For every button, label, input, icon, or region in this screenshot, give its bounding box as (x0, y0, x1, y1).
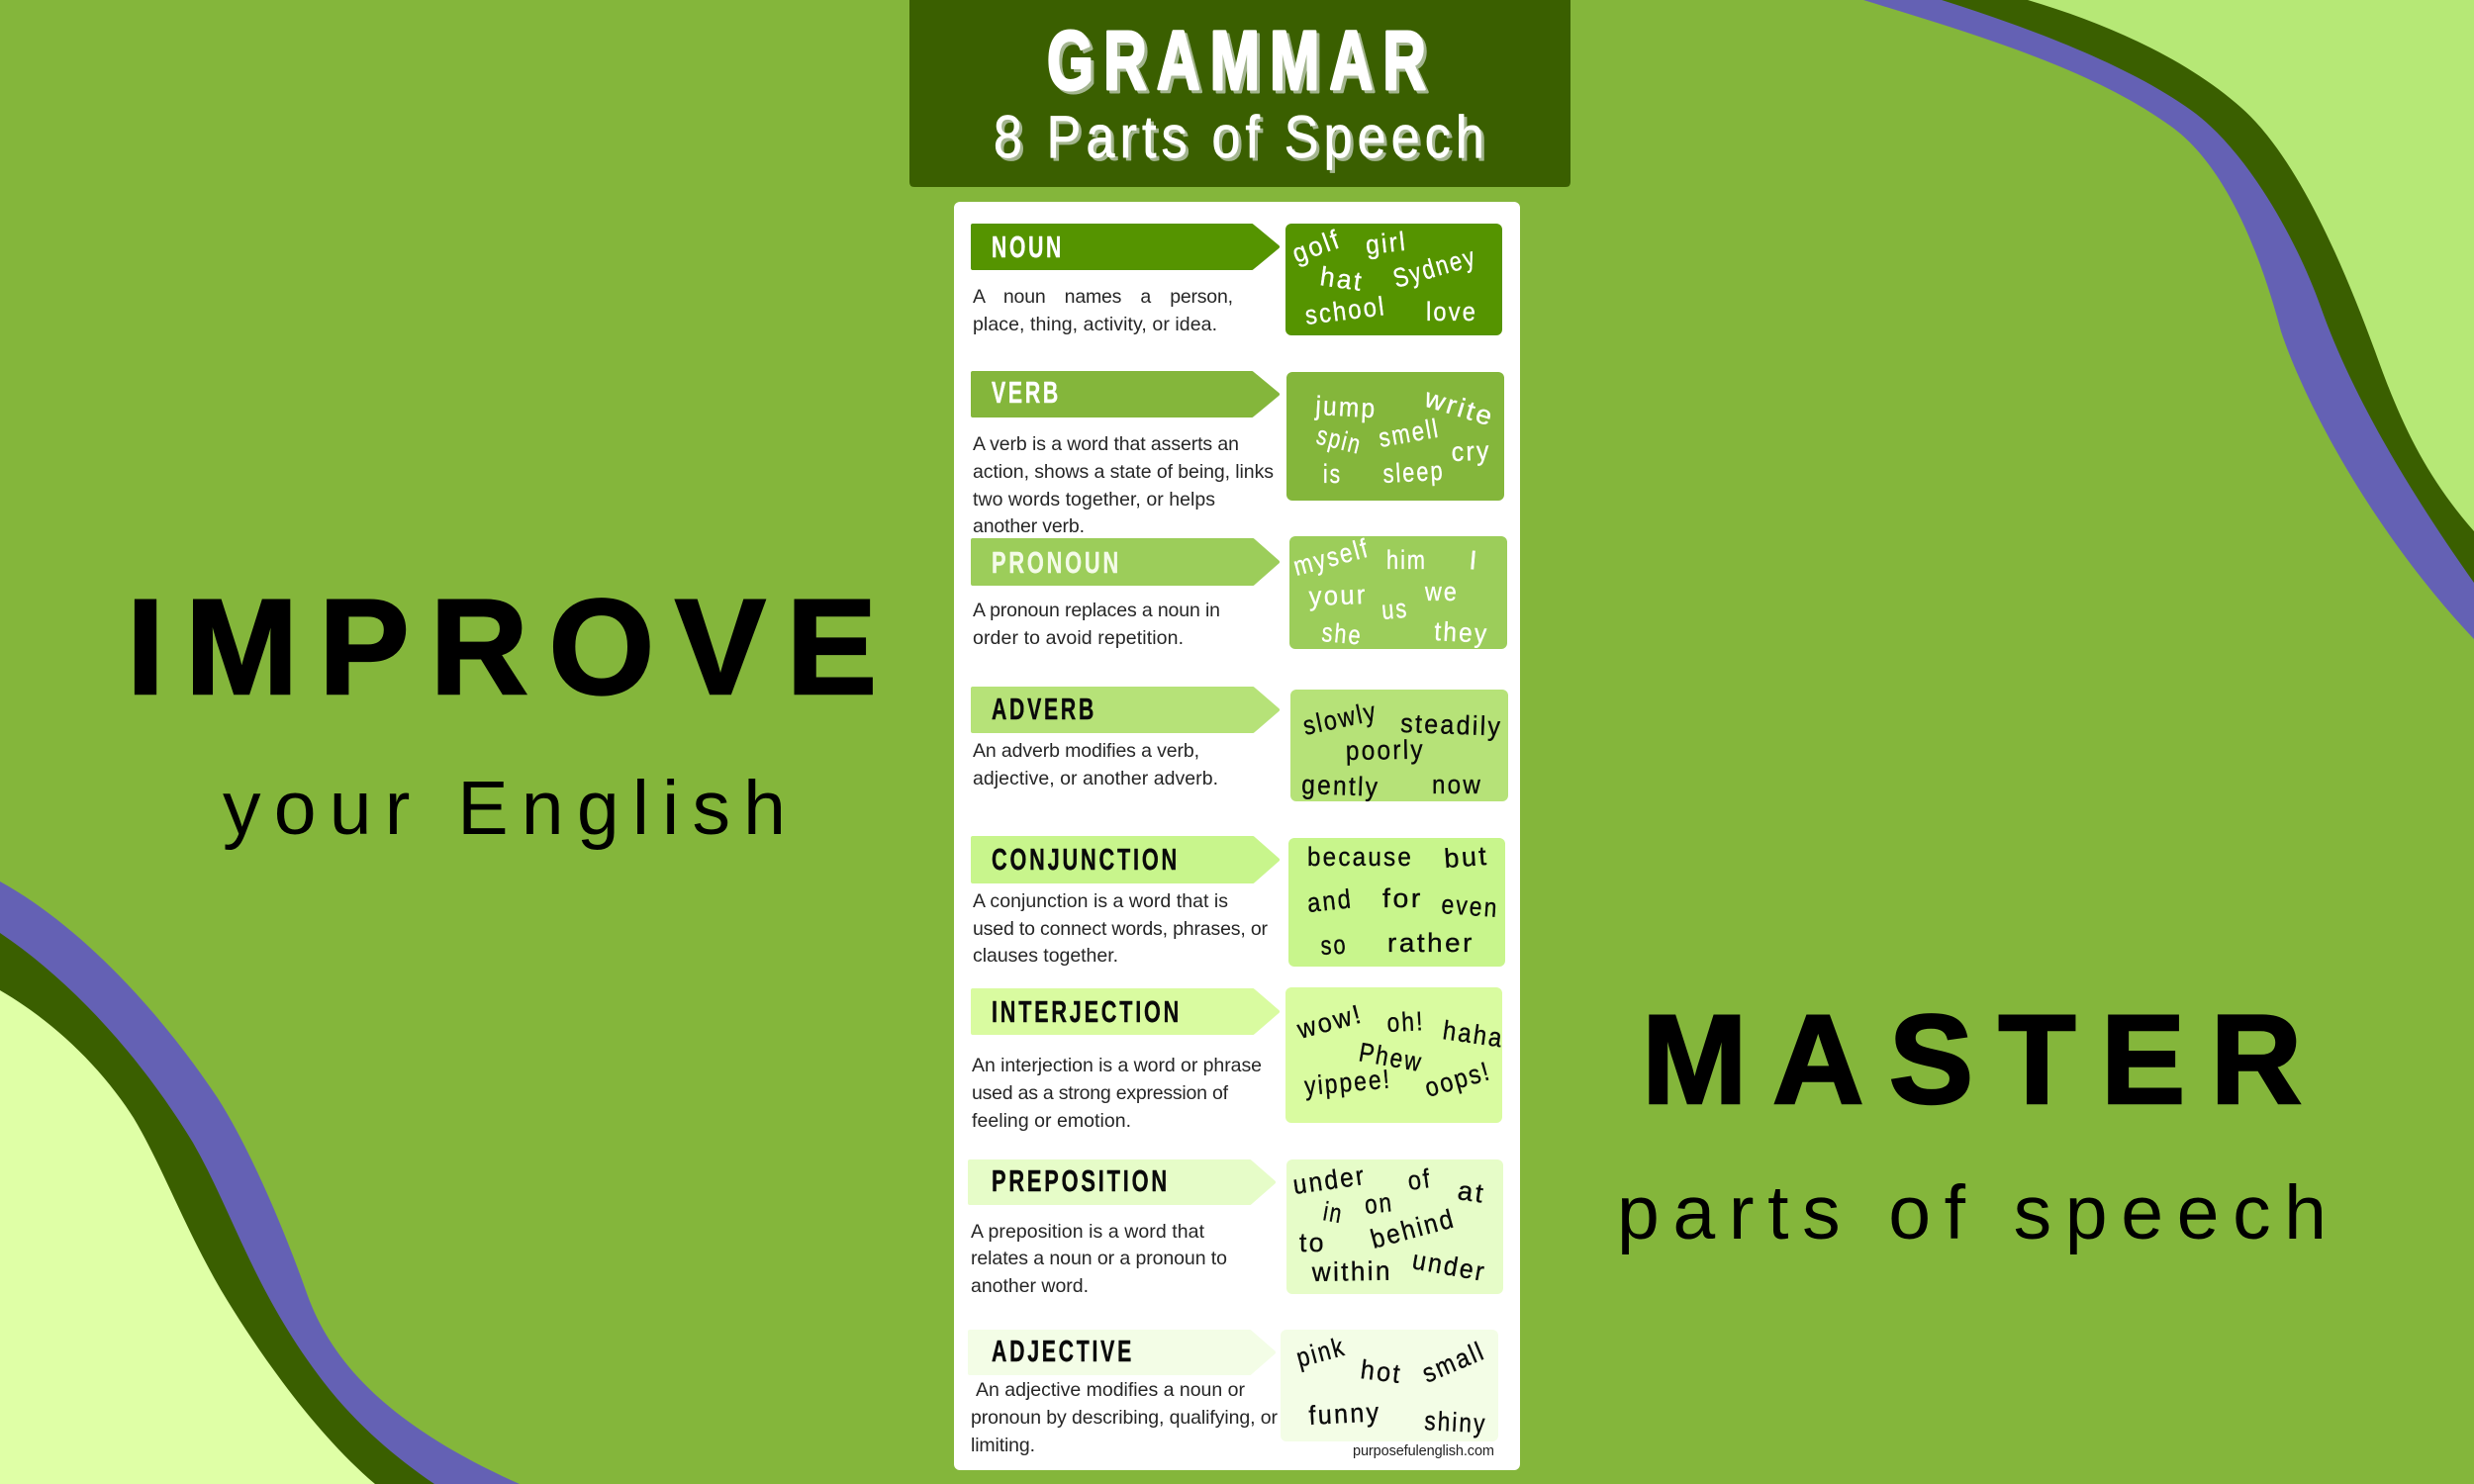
row: adverb: An adverb modifies a verb, (973, 740, 1199, 762)
row: verb: write (1420, 383, 1498, 432)
row: interjection (972, 987, 1506, 1132)
row: noun: love (1426, 297, 1477, 326)
row: noun: school (1303, 291, 1387, 330)
row: conjunction: CONJUNCTION (992, 842, 1180, 877)
row: noun: Sydney (1389, 241, 1479, 294)
row: interjection: An interjection is a word or phrase (972, 1055, 1262, 1076)
row: adjective: shiny (1424, 1406, 1487, 1438)
heading: improve your English (127, 572, 877, 851)
heading: master parts of speech: parts of speech (1617, 1170, 2327, 1255)
row: verb: action, shows a state of being, links (973, 461, 1274, 483)
row: adverb (973, 689, 1508, 802)
row: adjective: limiting. (971, 1435, 1035, 1456)
row: pronoun: they (1434, 616, 1489, 649)
heading: improve your English: IMPROVE (127, 572, 877, 723)
row: preposition: under (1410, 1245, 1488, 1287)
row: adverb: steadily (1400, 708, 1503, 742)
row: preposition (970, 1159, 1503, 1297)
heading: master parts of speech: MASTER (1642, 989, 2302, 1131)
row: conjunction (973, 838, 1505, 967)
row: pronoun: I (1468, 545, 1480, 576)
row: conjunction: so (1320, 930, 1348, 961)
row: adjective: hot (1359, 1354, 1404, 1389)
row: pronoun (973, 533, 1507, 651)
row: preposition: on (1363, 1187, 1394, 1220)
row: conjunction: because (1307, 842, 1413, 872)
heading: master parts of speech (1617, 989, 2327, 1255)
row: interjection: feeling or emotion. (972, 1110, 1131, 1132)
row: conjunction: used to connect words, phrases, or (973, 918, 1269, 940)
row: adjective: pink (1293, 1332, 1349, 1373)
row: verb: jump (1314, 391, 1378, 423)
row: adjective: pronoun by describing, qualifying, or (971, 1407, 1279, 1429)
row: preposition: of (1406, 1163, 1434, 1196)
row: adjective: An adjective modifies a noun or (976, 1379, 1245, 1401)
row: noun: girl (1364, 227, 1408, 260)
row: interjection: oh! (1386, 1006, 1425, 1038)
row: interjection: INTERJECTION (992, 994, 1182, 1029)
wave: bottom left (0, 881, 520, 1484)
row: preposition: in (1321, 1196, 1346, 1229)
wave: top right (1863, 0, 2474, 639)
row: verb: smell (1377, 414, 1442, 453)
row: interjection: oops! (1421, 1056, 1494, 1103)
row: pronoun: your (1308, 580, 1368, 611)
row: verb: another verb. (973, 515, 1085, 537)
row: conjunction: clauses together. (973, 945, 1118, 967)
row: interjection: Phew (1357, 1037, 1425, 1077)
row: conjunction: even (1441, 889, 1500, 923)
row: preposition: under (1291, 1160, 1368, 1200)
row: interjection: used as a strong expression of (972, 1082, 1229, 1104)
row: preposition: at (1456, 1175, 1487, 1209)
panel: parts of speech (954, 202, 1520, 1470)
row: adverb: ADVERB (992, 692, 1096, 726)
row: verb: cry (1451, 436, 1491, 467)
row: adverb: poorly (1346, 735, 1425, 766)
row: adjective: small (1418, 1336, 1489, 1389)
row: verb: two words together, or helps (973, 489, 1215, 510)
row: adjective: funny (1308, 1397, 1381, 1431)
row: conjunction: but (1443, 841, 1489, 874)
row: noun: A noun names a person, (973, 286, 1233, 308)
row: conjunction: for (1382, 883, 1423, 913)
row: noun: golf (1288, 224, 1345, 269)
row: preposition: another word. (971, 1275, 1089, 1297)
row: adjective: ADJECTIVE (992, 1334, 1134, 1368)
row: noun: NOUN (992, 230, 1064, 264)
row: adjective (970, 1330, 1498, 1456)
source credit: purposefulenglish.com (1353, 1443, 1494, 1459)
row: interjection: wow! (1293, 998, 1366, 1045)
row: verb: is (1323, 459, 1342, 489)
row: verb: sleep (1382, 456, 1445, 489)
row: pronoun: she (1320, 617, 1364, 651)
title: Grammar: GRAMMAR (1047, 14, 1436, 107)
row: noun: place, thing, activity, or idea. (973, 314, 1217, 335)
row: preposition: A preposition is a word that (971, 1221, 1205, 1243)
row: pronoun: PRONOUN (992, 545, 1121, 580)
row: conjunction: and (1305, 883, 1354, 918)
row: pronoun: A pronoun replaces a noun in (973, 600, 1220, 621)
title banner (909, 0, 1570, 187)
row: conjunction: A conjunction is a word that is (973, 890, 1228, 912)
row: pronoun: him (1386, 545, 1427, 575)
row: interjection: yippee! (1303, 1064, 1392, 1101)
row: noun: hat (1318, 261, 1366, 297)
row: adverb: now (1432, 770, 1482, 799)
row: noun (973, 224, 1502, 335)
row: pronoun: myself (1290, 533, 1373, 582)
row: preposition: relates a noun or a pronoun to (971, 1248, 1227, 1269)
row: verb (973, 372, 1504, 537)
row: preposition: within (1311, 1256, 1392, 1287)
row: preposition: behind (1368, 1203, 1459, 1254)
row: pronoun: we (1424, 577, 1459, 606)
row: verb: spin (1314, 420, 1365, 460)
row: interjection: haha (1441, 1015, 1506, 1054)
row: adverb: adjective, or another adverb. (973, 768, 1218, 789)
row: verb: A verb is a word that asserts an (973, 433, 1239, 455)
row: adverb: slowly (1300, 696, 1380, 741)
row: pronoun: us (1380, 594, 1409, 625)
row: preposition: to (1299, 1228, 1326, 1257)
row: pronoun: order to avoid repetition. (973, 627, 1184, 649)
subtitle: 8 Parts of Speech: 8 Parts of Speech (994, 104, 1489, 170)
row: adverb: gently (1301, 770, 1380, 802)
heading: improve your English: your English (223, 766, 786, 851)
row: preposition: PREPOSITION (992, 1163, 1170, 1198)
row: conjunction: rather (1387, 928, 1475, 958)
row: verb: VERB (992, 375, 1061, 410)
